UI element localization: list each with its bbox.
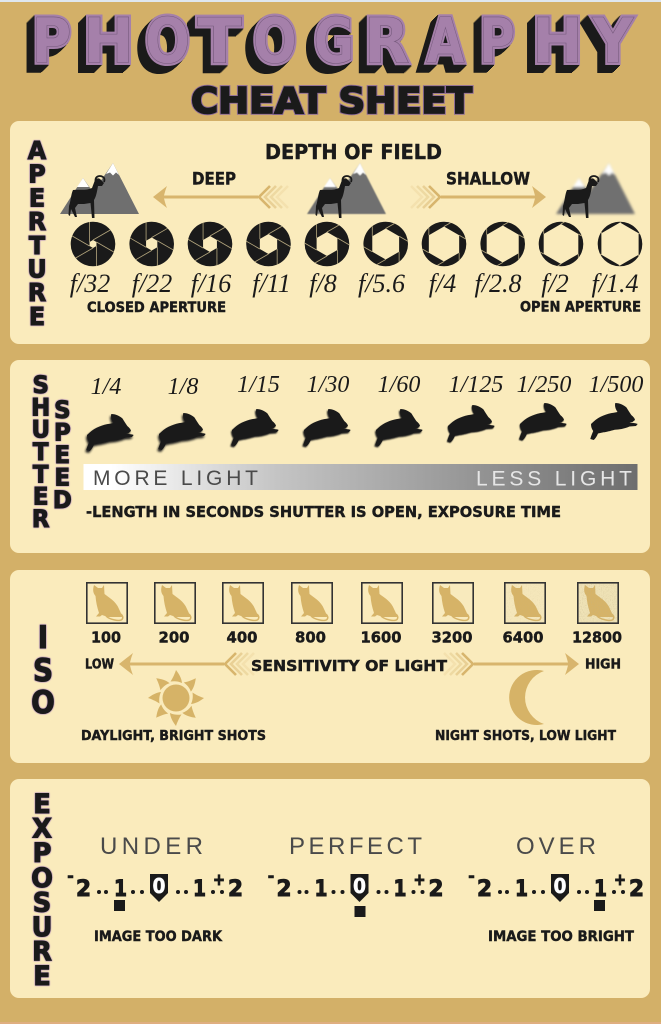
f-stop labels: f/2.8: [475, 269, 521, 298]
exposure meter: under: 1: [114, 877, 127, 902]
exposure meter: over: 0: [554, 874, 566, 898]
title: [32, 4, 635, 78]
label: night: NIGHT SHOTS, LOW LIGHT: [435, 728, 617, 744]
depth of field heading: DEPTH OF FIELD: [265, 140, 442, 164]
f-stop labels: f/8: [309, 269, 337, 298]
label: sensitivity of light: SENSITIVITY OF LIGHT: [251, 657, 448, 675]
title: H: [83, 4, 134, 78]
iso values: [91, 628, 622, 646]
title: P: [479, 4, 515, 78]
iso values: 3200: [432, 628, 473, 646]
f-stop labels: f/16: [191, 269, 231, 298]
icons: leaping rabbits: [85, 403, 638, 453]
shutter speed labels: 1/60: [378, 372, 420, 398]
arrow: towards low: [119, 653, 254, 675]
label: high: HIGH: [585, 658, 621, 672]
label: closed aperture: CLOSED APERTURE: [87, 300, 226, 316]
exposure meter: perfect: 2: [428, 877, 444, 902]
exposure meter: perfect: 1: [314, 877, 328, 902]
label: image too dark: IMAGE TOO DARK: [94, 929, 223, 945]
panel: aperture: [10, 121, 650, 344]
exposure meter: over: -: [468, 866, 475, 887]
exposure meter: over: +: [614, 870, 626, 889]
shutter speed labels: 1/125: [449, 372, 503, 398]
title: G: [314, 4, 354, 78]
title: O: [145, 4, 190, 78]
icon: blurred mountain with ram: [556, 163, 635, 218]
f-stop labels: f/1.4: [592, 269, 638, 298]
iso heading: ISO: [31, 620, 55, 720]
title: A: [426, 4, 465, 78]
title: Y: [591, 4, 635, 78]
title: O: [253, 4, 297, 78]
title: T: [197, 4, 242, 78]
title: G: [314, 4, 354, 78]
exposure meter: perfect: -: [268, 866, 274, 887]
label: less light: LESS LIGHT: [476, 468, 632, 490]
aperture heading: APERTURE: [27, 135, 47, 331]
title: P: [32, 4, 72, 78]
arrow: towards shallow: [411, 186, 546, 208]
exposure meter: over: 1: [594, 877, 607, 902]
shutter speed labels: [91, 372, 643, 400]
iso sample boxes: [87, 583, 618, 623]
exposure meter: perfect: [268, 866, 444, 917]
f-stop labels: f/11: [252, 269, 291, 298]
title: P: [32, 4, 72, 78]
shutter speed labels: 1/30: [307, 372, 349, 398]
shutter speed labels: 1/15: [237, 372, 280, 398]
iso values: 400: [226, 628, 258, 646]
label: low: LOW: [85, 658, 114, 672]
shutter speed labels: 1/500: [589, 372, 643, 398]
f-stop labels: f/32: [70, 269, 110, 298]
title: T: [197, 4, 242, 78]
f-stop labels: f/5.6: [358, 269, 405, 298]
exposure meter: over: 2: [477, 877, 492, 902]
subtitle: CHEAT SHEET: [191, 81, 472, 122]
title: Y: [591, 4, 635, 78]
speed heading: SPEED: [53, 395, 72, 514]
iso values: 200: [158, 628, 190, 646]
exposure meter: over: 2: [629, 877, 644, 902]
arrow: towards deep: [153, 186, 288, 208]
icon: moon: [509, 670, 544, 725]
iso values: 1600: [360, 628, 402, 646]
exposure meter: perfect: 1: [394, 877, 406, 902]
f-stop labels: f/22: [132, 269, 172, 298]
exposure meter: under: 2: [76, 877, 91, 902]
exposure meter: under: +: [213, 870, 225, 889]
exposure meter: perfect: 0: [353, 874, 366, 898]
exposure meter: over: [468, 866, 644, 911]
exposure meter: under: 0: [152, 874, 166, 898]
exposure meter: perfect: 2: [276, 877, 292, 902]
iso values: 100: [91, 628, 121, 646]
icon: sun: [148, 670, 204, 726]
label: perfect: PERFECT: [289, 833, 422, 860]
exposure meter: over: 1: [515, 877, 528, 902]
title: A: [426, 4, 465, 78]
shutter speed labels: 1/8: [168, 374, 198, 400]
iso values: 6400: [502, 628, 544, 646]
light gradient bar: [84, 464, 638, 490]
title: R: [364, 4, 410, 78]
icon: sharp mountain with ram: [60, 163, 139, 218]
shutter speed labels: 1/250: [517, 372, 571, 398]
title: O: [145, 4, 190, 78]
aperture diagrams: [71, 222, 642, 266]
title: H: [532, 4, 583, 78]
label: daylight: DAYLIGHT, BRIGHT SHOTS: [81, 728, 266, 744]
f-stop labels: [70, 269, 638, 298]
iso values: 800: [295, 628, 326, 646]
exposure meter: under: 1: [193, 877, 206, 902]
exposure meter: under: -: [67, 866, 74, 887]
label: more light: MORE LIGHT: [93, 467, 258, 490]
f-stop labels: f/2: [541, 269, 569, 298]
icon: slightly blurred mountain with ram: [307, 163, 386, 218]
title: R: [364, 4, 410, 78]
title: H: [83, 4, 134, 78]
panel: iso: [10, 570, 650, 763]
label: shallow: SHALLOW: [446, 170, 530, 190]
arrow: towards high: [444, 653, 579, 675]
exposure meter: under: 2: [228, 877, 243, 902]
subtitle: CHEAT SHEET: [191, 81, 472, 122]
panel: exposure: [10, 779, 650, 998]
title: H: [532, 4, 583, 78]
exposure heading: EXPOSURE: [31, 789, 53, 992]
title: O: [253, 4, 297, 78]
label: open aperture: OPEN APERTURE: [520, 300, 641, 316]
label: deep: DEEP: [192, 170, 236, 190]
iso values: 12800: [572, 628, 622, 646]
label: over: OVER: [516, 833, 596, 860]
label: image too bright: IMAGE TOO BRIGHT: [488, 929, 634, 945]
exposure meter: under: [67, 866, 243, 911]
panel: shutter speed: [10, 360, 650, 553]
f-stop labels: f/4: [429, 269, 456, 298]
shutter heading: SHUTTER: [31, 370, 50, 533]
label: under: UNDER: [100, 833, 203, 860]
exposure meter: perfect: +: [414, 870, 426, 889]
shutter description: -LENGTH IN SECONDS SHUTTER IS OPEN, EXPOSURE TIME: [86, 503, 561, 521]
shutter speed labels: 1/4: [91, 374, 121, 400]
title: P: [479, 4, 515, 78]
